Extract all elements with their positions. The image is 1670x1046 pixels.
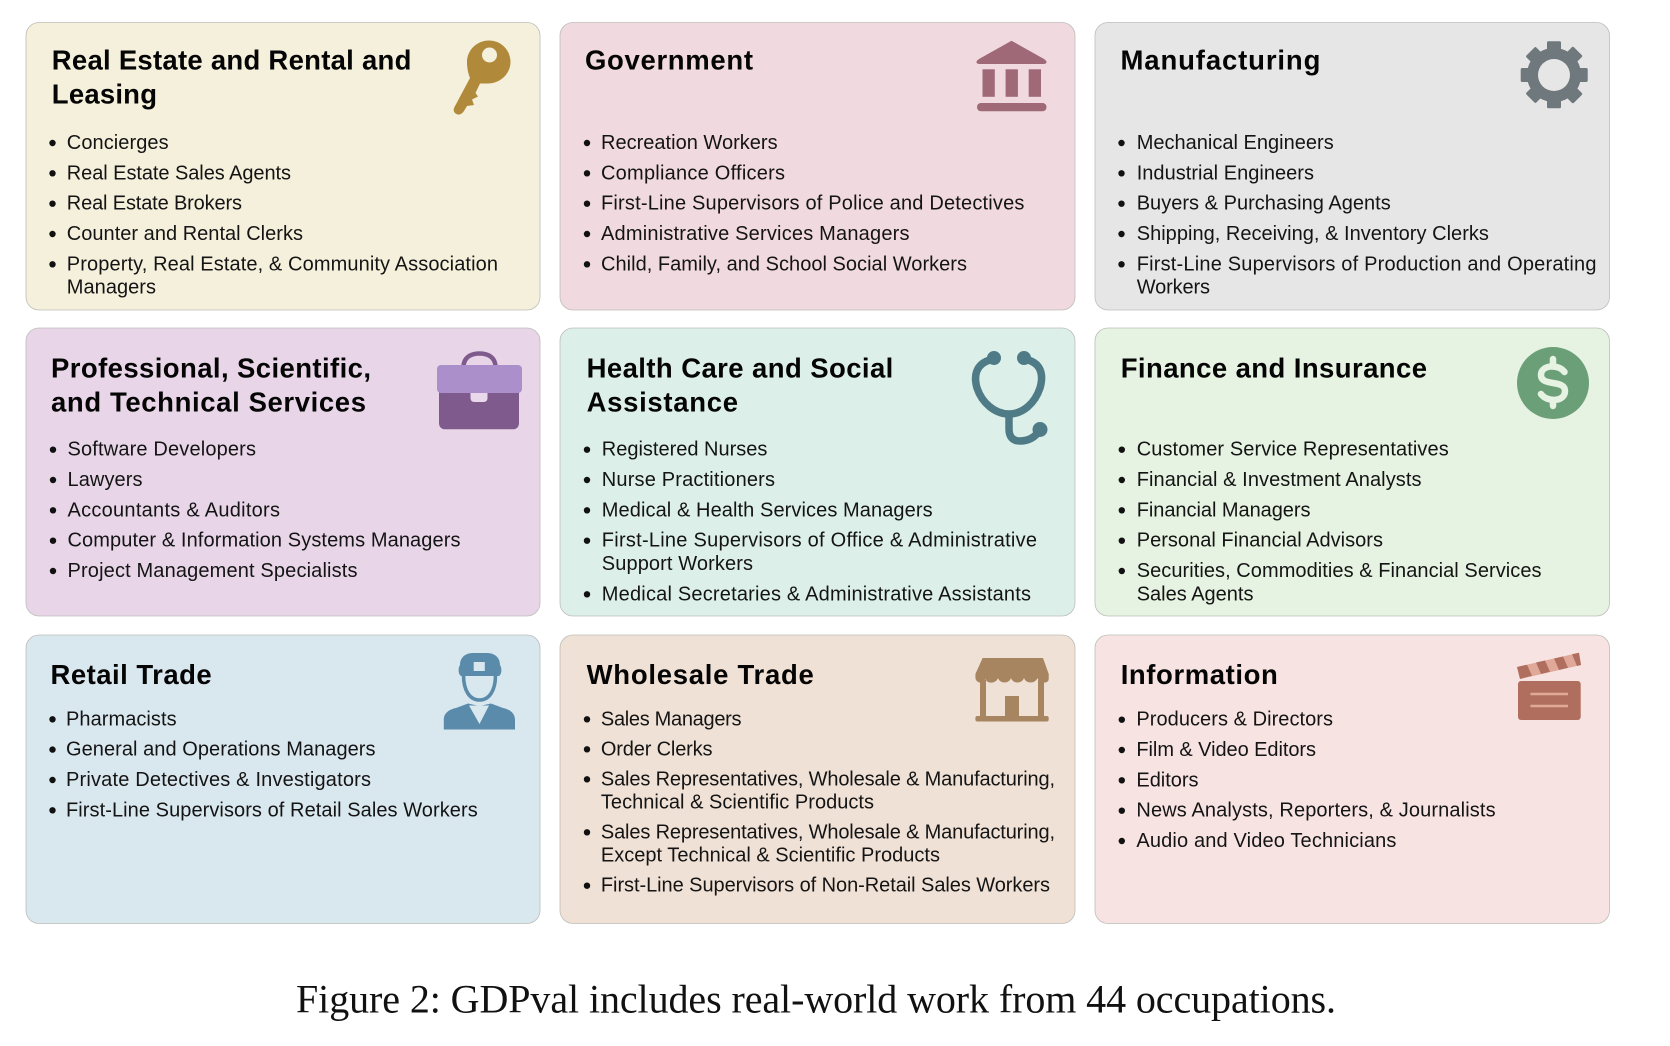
- icon: stethoscope: [976, 352, 1046, 441]
- list: health care occupations: Medical & Health Services Managers: [602, 499, 933, 521]
- icon: key: [454, 40, 510, 115]
- list: real estate occupations: Managers: [67, 277, 156, 299]
- icon: gear: [1521, 41, 1588, 108]
- list: wholesale occupations: [584, 708, 1055, 897]
- icon: briefcase: [437, 354, 522, 429]
- list: health care occupations: Nurse Practitioners: [602, 469, 775, 491]
- list: retail occupations: Private Detectives & Investigators: [66, 769, 371, 791]
- heading: Manufacturing: Manufacturing: [1120, 45, 1320, 76]
- list: professional occupations: Accountants & Auditors: [68, 499, 280, 521]
- list: information occupations: Editors: [1136, 769, 1198, 791]
- list: real estate occupations: Real Estate Brokers: [67, 193, 242, 215]
- icon: store worker: [444, 653, 515, 730]
- list: government occupations: Child, Family, and School Social Workers: [601, 253, 967, 275]
- list: wholesale occupations: Technical & Scientific Products: [601, 792, 874, 814]
- heading: Real Estate and Rental and Leasing: [52, 45, 411, 110]
- icon: clapperboard: [1517, 653, 1581, 720]
- heading: Health Care and Social Assistance: Assistance: [587, 386, 738, 417]
- list: retail occupations: First-Line Supervisors of Retail Sales Workers: [66, 799, 478, 821]
- list: finance occupations: Customer Service Representatives: [1137, 439, 1449, 461]
- list: health care occupations: [584, 439, 1037, 605]
- list: wholesale occupations: Sales Representatives, Wholesale & Manufacturing,: [601, 821, 1055, 843]
- list: professional occupations: Software Developers: [68, 439, 256, 461]
- panel: Real Estate and Rental and Leasing: [26, 22, 540, 310]
- list: professional occupations: Lawyers: [68, 469, 142, 491]
- list: finance occupations: Financial & Investment Analysts: [1137, 469, 1422, 491]
- list: information occupations: News Analysts, Reporters, & Journalists: [1136, 800, 1496, 822]
- heading: Wholesale Trade: Wholesale Trade: [587, 659, 814, 690]
- list: finance occupations: Securities, Commodities & Financial Services: [1137, 560, 1542, 582]
- list: information occupations: [1119, 709, 1496, 852]
- list: real estate occupations: Property, Real Estate, & Community Association: [67, 253, 498, 275]
- list: manufacturing occupations: [1118, 132, 1596, 299]
- panel: Health Care and Social Assistance: [560, 328, 1075, 616]
- heading: Professional, Scientific, and Technical Services: [51, 352, 371, 417]
- panel: Retail Trade: [26, 635, 540, 924]
- heading: Professional, Scientific, and Technical Services: and Technical Services: [51, 386, 366, 417]
- list: health care occupations: Registered Nurses: [602, 439, 767, 461]
- list: information occupations: Audio and Video Technicians: [1136, 830, 1396, 852]
- list: real estate occupations: Counter and Rental Clerks: [67, 223, 303, 245]
- icon: dollar coin: [1517, 347, 1589, 419]
- list: wholesale occupations: Sales Managers: [601, 708, 742, 730]
- list: finance occupations: Personal Financial Advisors: [1137, 530, 1383, 552]
- list: professional occupations: [50, 439, 461, 582]
- list: wholesale occupations: First-Line Supervisors of Non-Retail Sales Workers: [601, 875, 1050, 897]
- panel: Information: [1095, 635, 1610, 924]
- list: health care occupations: First-Line Supervisors of Office & Administrative: [602, 530, 1037, 552]
- list: health care occupations: Support Workers: [602, 553, 753, 575]
- heading: Retail Trade: Retail Trade: [50, 659, 212, 690]
- list: health care occupations: Medical Secretaries & Administrative Assistants: [602, 583, 1031, 605]
- list: government occupations: Administrative Services Managers: [601, 223, 910, 245]
- list: wholesale occupations: Sales Representatives, Wholesale & Manufacturing,: [601, 768, 1055, 790]
- heading: Finance and Insurance: Finance and Insurance: [1121, 352, 1427, 383]
- heading: Professional, Scientific, and Technical Services: Professional, Scientific,: [51, 352, 371, 383]
- caption: Figure 2: GDPval includes real-world work from 44 occupations.: [296, 977, 1336, 1022]
- list: government occupations: Recreation Workers: [601, 132, 778, 154]
- list: manufacturing occupations: Mechanical Engineers: [1137, 132, 1334, 154]
- heading: Real Estate and Rental and Leasing: Leasing: [52, 79, 157, 110]
- heading: Health Care and Social Assistance: [587, 352, 893, 417]
- list: professional occupations: Project Management Specialists: [68, 560, 358, 582]
- list: manufacturing occupations: First-Line Supervisors of Production and Operating: [1137, 253, 1596, 275]
- list: manufacturing occupations: Shipping, Receiving, & Inventory Clerks: [1137, 223, 1489, 245]
- list: wholesale occupations: Order Clerks: [601, 738, 712, 760]
- heading: Government: Government: [585, 45, 753, 76]
- heading: Real Estate and Rental and Leasing: Real Estate and Rental and: [52, 45, 411, 76]
- list: wholesale occupations: Except Technical & Scientific Products: [601, 845, 940, 867]
- list: information occupations: Film & Video Editors: [1136, 739, 1316, 761]
- list: government occupations: Compliance Officers: [601, 162, 785, 184]
- panel: Finance and Insurance: [1095, 328, 1610, 616]
- list: retail occupations: Pharmacists: [66, 708, 177, 730]
- panel: Manufacturing: [1095, 22, 1610, 310]
- list: government occupations: [584, 132, 1024, 275]
- list: manufacturing occupations: Industrial Engineers: [1137, 162, 1314, 184]
- panel: Wholesale Trade: [560, 635, 1075, 924]
- panel: Professional, Scientific, and Technical Services: [26, 328, 540, 616]
- icon: storefront: [975, 658, 1049, 722]
- list: finance occupations: Financial Managers: [1137, 499, 1310, 521]
- list: government occupations: First-Line Supervisors of Police and Detectives: [601, 193, 1024, 215]
- list: finance occupations: [1119, 439, 1542, 605]
- list: professional occupations: Computer & Information Systems Managers: [68, 530, 460, 552]
- list: retail occupations: General and Operations Managers: [66, 739, 376, 761]
- list: finance occupations: Sales Agents: [1137, 583, 1254, 605]
- list: manufacturing occupations: Workers: [1137, 277, 1210, 299]
- list: retail occupations: [49, 708, 478, 821]
- heading: Information: Information: [1121, 659, 1278, 690]
- heading: Health Care and Social Assistance: Health Care and Social: [587, 352, 893, 383]
- list: manufacturing occupations: Buyers & Purchasing Agents: [1137, 193, 1391, 215]
- list: real estate occupations: Concierges: [67, 132, 169, 154]
- list: real estate occupations: [49, 132, 498, 299]
- list: real estate occupations: Real Estate Sales Agents: [67, 162, 291, 184]
- panel: Government: [560, 22, 1075, 310]
- list: information occupations: Producers & Directors: [1136, 709, 1333, 731]
- icon: government building: [976, 41, 1047, 111]
